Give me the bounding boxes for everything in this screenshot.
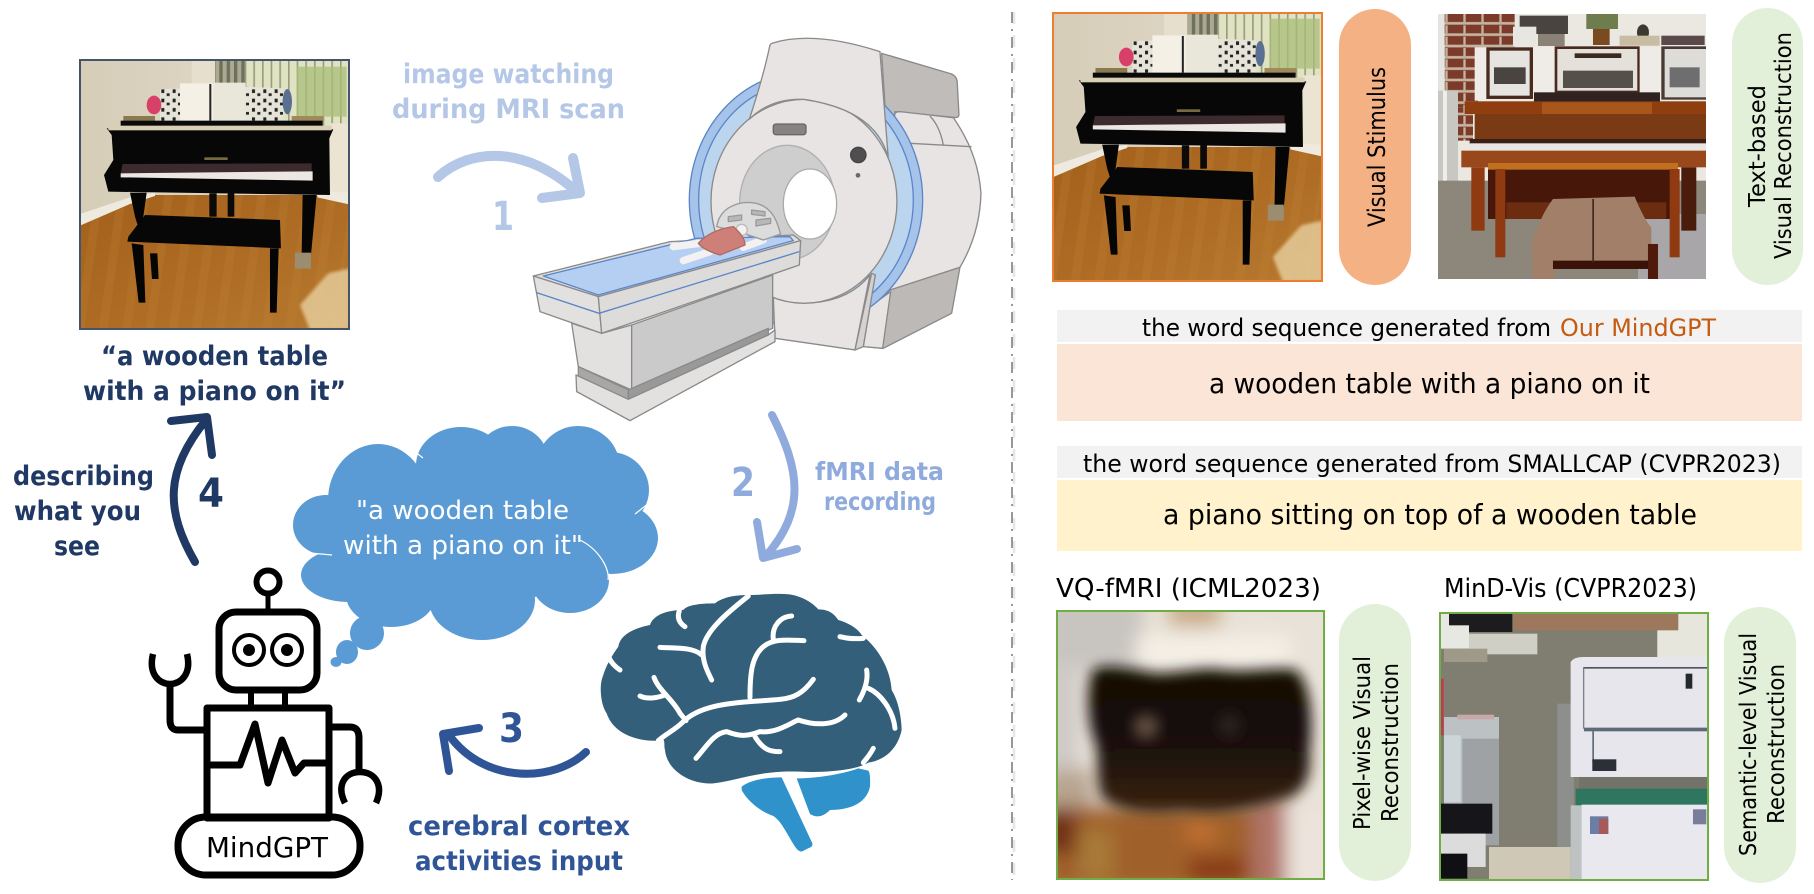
label: fMRI data recording [815,457,944,516]
arrow 4 [171,417,212,562]
icon: brain [601,594,902,852]
divider [1012,12,1014,880]
icon: MindGPT robot [152,570,379,875]
pill: Visual Stimulus [1339,9,1411,285]
step number 4: 4 [198,471,224,517]
pill: Visual Stimulus: Visual Stimulus [1363,67,1391,227]
semantic reconstruction image [1439,612,1709,882]
pill: Pixel-wise Visual Reconstruction: Pixel-wise Visual [1350,656,1376,830]
generated sentence: a wooden table with a piano on it [1209,367,1650,400]
thought bubble [293,426,658,667]
pill: Text-based Visual Reconstruction [1732,8,1803,285]
label: describing what you see: describing [13,461,154,492]
arrow 3 [443,728,586,774]
heading bar: Our MindGPT [1560,314,1716,342]
generated piano image [1438,14,1708,281]
generated sentence: a piano sitting on top of a wooden table [1163,498,1697,531]
panel: MindGPT workflow [13,38,981,877]
blurred reconstruction [1056,610,1325,880]
label: describing what you see: what you [14,496,141,527]
heading: MinD-Vis (CVPR2023) [1444,574,1697,604]
panel: SMALLCAP word sequence [1057,446,1802,551]
caption: stimulus description [83,341,346,407]
label: cerebral cortex activities input: activities input [415,846,623,877]
caption: stimulus description: “a wooden table [101,341,328,372]
heading bar: the word sequence generated from [1142,314,1551,342]
cloud text: "a wooden table [356,496,569,526]
generated sentence [1057,480,1802,551]
pill: Text-based Visual Reconstruction: Text-based [1745,85,1771,208]
heading: VQ-fMRI (ICML2023) [1056,574,1321,604]
arrow 1 [438,156,580,198]
label: fMRI data recording: fMRI data [815,457,944,486]
icon: MRI scanner [533,38,981,421]
label: describing what you see: see [54,531,100,562]
panel: VQ-fMRI [1043,574,1411,893]
robot name: MindGPT [206,831,329,864]
panel: text-based reconstruction [1438,8,1803,285]
label: image watching: during MRI scan [392,94,625,125]
panel: MinD-Vis [1439,574,1796,883]
pill: Semantic-level Visual Reconstruction: Semantic-level Visual [1736,633,1762,856]
label: image watching: image watching [403,59,614,90]
pill: Text-based Visual Reconstruction: Visual Reconstruction [1771,32,1797,259]
arrow 2 [757,415,797,558]
heading bar: the word sequence generated from SMALLCAP (CVPR2023) [1083,450,1781,478]
pill: Pixel-wise Visual Reconstruction: Reconstruction [1378,663,1404,822]
caption: stimulus description: with a piano on it” [83,376,346,407]
step number 1: 1 [492,194,514,240]
label: cerebral cortex activities input [408,811,630,877]
panel: visual stimulus [1037,9,1411,285]
stimulus photo [1037,12,1327,282]
pill: Semantic-level Visual Reconstruction [1724,607,1796,883]
step number 2: 2 [731,460,755,506]
label: image watching [392,59,625,125]
label: describing what you see [13,461,154,562]
panel: MindGPT word sequence [1057,310,1802,421]
heading bar [1057,310,1802,342]
cloud text: with a piano on it" [343,531,583,561]
label: cerebral cortex activities input: cerebral cortex [408,811,630,842]
visual stimulus photo [65,60,354,330]
label: fMRI data recording: recording [824,487,936,516]
pill: Semantic-level Visual Reconstruction: Reconstruction [1764,664,1790,824]
generated sentence [1057,344,1802,421]
pill: Pixel-wise Visual Reconstruction [1339,604,1411,881]
step number 3: 3 [499,706,524,752]
cloud text [343,496,583,561]
